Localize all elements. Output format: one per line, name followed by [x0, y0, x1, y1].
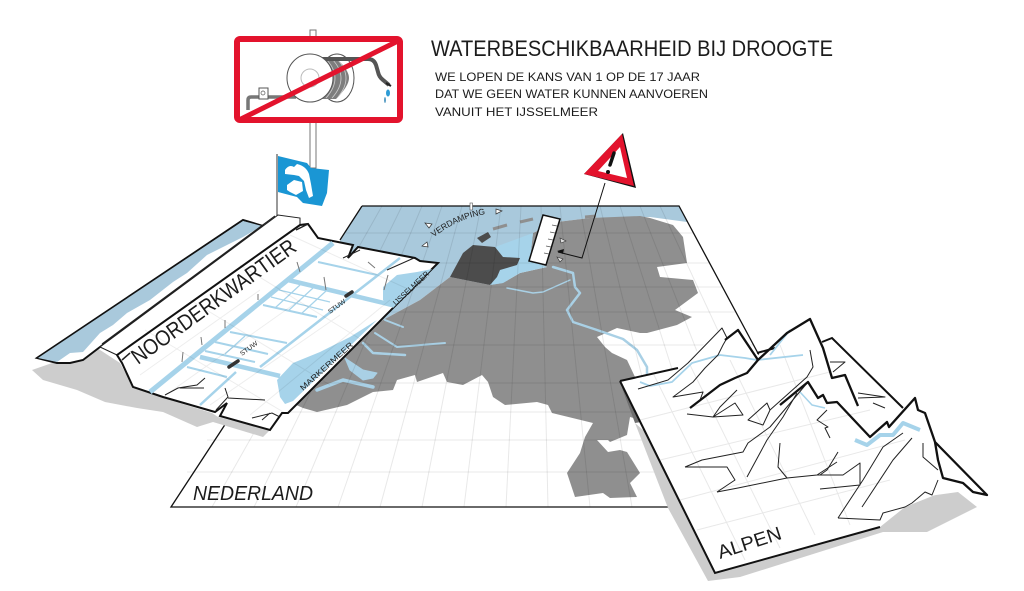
bold ridges: [690, 319, 987, 495]
thin ridges: [638, 328, 938, 520]
rivers: [640, 330, 920, 445]
title: WATERBESCHIKBAARHEID BIJ DROOGTE: [431, 36, 833, 61]
texel: [477, 232, 491, 243]
sand banks: [493, 216, 596, 229]
flag: [277, 154, 329, 216]
sea: [228, 206, 687, 420]
rivers: [317, 267, 647, 390]
map border: [171, 206, 760, 507]
markermeer water: [277, 320, 377, 404]
ijsselmeer: [480, 233, 547, 285]
label: markermeer: MARKERMEER: [298, 340, 355, 392]
map sheet: [171, 206, 840, 507]
text block: intro: [435, 70, 708, 119]
text block: intro: DAT WE GEEN WATER KUNNEN AANVOEREN: [435, 87, 708, 101]
label: stuw 2: STUW: [327, 298, 348, 316]
text block: intro: VANUIT HET IJSSELMEER: [435, 105, 598, 119]
shadow: [32, 348, 270, 437]
ijsselmeer water: [383, 269, 432, 308]
grid: [140, 235, 410, 415]
icon: hose reel: [248, 54, 391, 110]
sign pole: [310, 30, 316, 168]
grid: [640, 345, 905, 560]
land: [285, 216, 698, 498]
canals: [150, 243, 400, 405]
label: nederland: NEDERLAND: [193, 483, 313, 505]
dune water: [38, 221, 262, 362]
map: Nederland: [170, 133, 760, 508]
label: alpen: ALPEN: [715, 523, 784, 564]
evaporation label: [421, 202, 503, 248]
shadow: [635, 423, 977, 581]
ridge: [100, 215, 300, 355]
cracks: [122, 224, 414, 420]
stuw markers: [229, 292, 352, 367]
dune sea panel: [37, 220, 263, 363]
evaporation label: VERDAMPING: [430, 208, 484, 236]
sheet: [117, 224, 438, 430]
sheet: [620, 319, 987, 573]
map: Alpen: [620, 319, 987, 581]
warning sign: [557, 133, 636, 258]
label: stuw 1: STUW: [239, 340, 260, 358]
label: noorderkwartier: NOORDERKWARTIER: [126, 234, 301, 369]
shadow on land: [622, 388, 641, 423]
ruler: [529, 215, 566, 265]
grid: [187, 206, 820, 507]
text block: intro: WE LOPEN DE KANS VAN 1 OP DE 17 JAAR: [435, 70, 700, 84]
sign: no water supply: [237, 39, 400, 120]
map: Noorderkwartier: [32, 215, 438, 437]
label: ijsselmeer: IJSSELMEER: [391, 269, 431, 307]
noord-holland: [450, 245, 520, 285]
